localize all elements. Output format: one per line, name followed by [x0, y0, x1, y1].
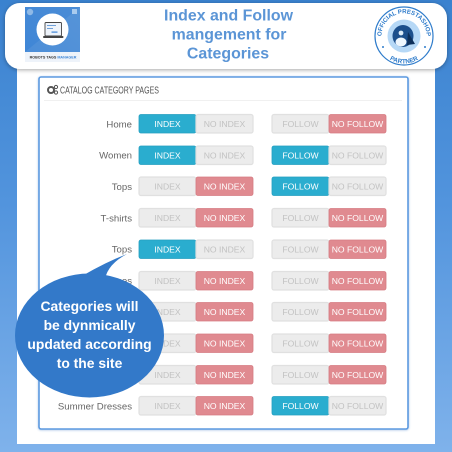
icon: official prestashop partner badge: PARTNER [390, 56, 418, 64]
row: Home: INDEX [154, 119, 181, 129]
row: Home: Home [106, 120, 132, 130]
row 9: INDEX [154, 370, 181, 380]
row: Tops [112, 177, 386, 196]
callout [15, 254, 164, 398]
row: T-shirts: T-shirts [101, 214, 132, 224]
row: Dresses: NO FOLLOW [332, 276, 384, 286]
row: Women: NO INDEX [204, 150, 246, 160]
row: Women: NO FOLLOW [332, 150, 384, 160]
row: Tops: FOLLOW [282, 182, 320, 192]
row: Tops second: INDEX [154, 244, 181, 254]
title: Index and Follow [164, 8, 294, 24]
row 9: FOLLOW [282, 370, 320, 380]
callout: be dynmically [44, 317, 136, 333]
row 8: NO INDEX [204, 338, 246, 348]
header bar [2, 2, 450, 73]
row: T-shirts: INDEX [154, 213, 181, 223]
icon: official prestashop partner badge [374, 6, 434, 66]
title: Categories [187, 46, 269, 62]
row: T-shirts: FOLLOW [282, 213, 320, 223]
row: Home: NO FOLLOW [332, 119, 384, 129]
row: Women: INDEX [154, 150, 181, 160]
panel heading: CATALOG CATEGORY PAGES [60, 86, 159, 96]
row 8: FOLLOW [282, 338, 320, 348]
panel: catalog category pages [39, 77, 408, 429]
row 9: NO INDEX [204, 370, 246, 380]
row 9 [139, 366, 386, 384]
row: Home: NO INDEX [204, 119, 246, 129]
callout: updated according [27, 336, 152, 352]
row: Women: FOLLOW [282, 150, 320, 160]
row 7: NO INDEX [204, 307, 246, 317]
callout: to the site [57, 355, 123, 371]
row: Women [99, 146, 386, 164]
row: T-shirts: NO FOLLOW [332, 213, 384, 223]
row: T-shirts: NO INDEX [204, 213, 246, 223]
row: Summer Dresses: Summer Dresses [58, 402, 132, 412]
row: Tops second: NO FOLLOW [332, 244, 384, 254]
row: Tops second: Tops [112, 244, 132, 256]
row: Summer Dresses: NO FOLLOW [332, 401, 384, 411]
row: Women: Women [99, 150, 132, 162]
title: mangement for [172, 26, 286, 44]
panel heading [44, 85, 402, 101]
row: Tops: INDEX [154, 182, 181, 192]
row 8: INDEX [154, 338, 181, 348]
row: Summer Dresses: NO INDEX [204, 401, 246, 411]
row: Summer Dresses: INDEX [154, 401, 181, 411]
icon: robots tags manager logo [25, 7, 80, 62]
row: Dresses: Dresses [97, 276, 132, 287]
row: Home: FOLLOW [282, 119, 320, 129]
row: Tops: Tops [112, 182, 132, 193]
row 7: FOLLOW [282, 307, 320, 317]
row: Dresses [97, 272, 386, 290]
row: T-shirts [101, 208, 386, 227]
icon: official prestashop partner badge: OFFICIAL PRESTASHOP [377, 9, 431, 36]
row: Summer Dresses: FOLLOW [282, 401, 320, 411]
row 9: NO FOLLOW [332, 370, 384, 380]
row: Tops second [112, 240, 386, 258]
row: Dresses: INDEX [154, 276, 181, 286]
title [164, 8, 294, 62]
callout: Categories will [40, 298, 139, 314]
row: Dresses: FOLLOW [282, 276, 320, 286]
row: Tops second: FOLLOW [282, 244, 320, 254]
icon: robots tags manager logo: ROBOTS TAGS MANAGER [30, 55, 77, 59]
row 7 [139, 302, 386, 321]
row: Tops: NO INDEX [204, 182, 246, 192]
row: Summer Dresses [58, 396, 386, 415]
row: Dresses: NO INDEX [204, 276, 246, 286]
row: Tops: NO FOLLOW [332, 182, 384, 192]
row: Tops second: NO INDEX [204, 244, 246, 254]
row 7: NO FOLLOW [332, 307, 384, 317]
row 8 [139, 334, 386, 352]
row 7: INDEX [154, 307, 181, 317]
row 8: NO FOLLOW [332, 338, 384, 348]
row: Home [106, 114, 386, 133]
